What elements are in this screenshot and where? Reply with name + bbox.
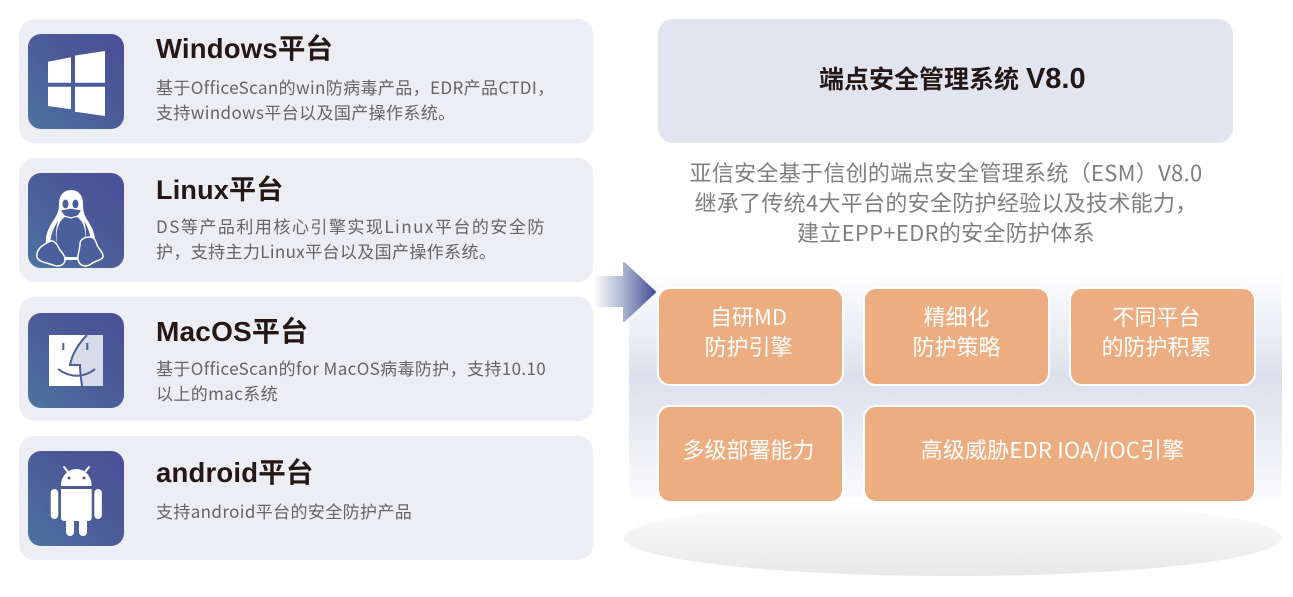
heading: system name: 端点安全管理系统 V8.0 [819, 63, 1086, 95]
text: android description: 支持android平台的安全防护产品 [156, 498, 412, 523]
capability: cross-platform experience [1069, 287, 1256, 386]
icon: Linux penguin [28, 173, 124, 268]
panel: MacOS platform [19, 297, 593, 421]
capability: multi-level deployment: 多级部署能力 [682, 433, 814, 465]
panel: system title [658, 19, 1233, 143]
capability: cross-platform experience: 的防护积累 [1101, 330, 1212, 362]
text: system introduction: 亚信安全基于信创的端点安全管理系统（ESM）V8.0 [690, 156, 1202, 188]
heading: Linux: Linux平台 [156, 175, 283, 205]
capability: fine-grained policy [863, 287, 1050, 386]
icon: Android robot [28, 451, 124, 546]
decorative base ellipse [624, 500, 1282, 576]
heading: Windows: Windows平台 [156, 33, 333, 64]
capability: cross-platform experience: 不同平台 [1112, 300, 1200, 332]
capability: self-developed MD engine: 自研MD [710, 300, 787, 332]
icon: Windows logo [28, 34, 124, 129]
text: MacOS description [156, 355, 546, 405]
text: system introduction [690, 156, 1202, 248]
arrow [596, 262, 656, 322]
capability: fine-grained policy: 精细化 [923, 300, 990, 332]
text: Linux description [156, 213, 546, 263]
panel: Windows platform [19, 19, 593, 143]
heading: MacOS: MacOS平台 [156, 316, 308, 347]
capability: self-developed MD engine: 防护引擎 [704, 330, 792, 362]
icon: Mac Finder [28, 313, 124, 408]
capability: advanced threat EDR engine [863, 405, 1256, 503]
panel: Linux platform [19, 158, 593, 282]
capability: fine-grained policy: 防护策略 [912, 330, 1000, 362]
capability: advanced threat EDR engine: 高级威胁EDR IOA/IOC引擎 [921, 433, 1184, 465]
panel: android platform [19, 436, 593, 560]
text: Linux description: DS等产品利用核心引擎实现Linux平台的安全防 [156, 213, 546, 238]
text: Linux description: 护，支持主力Linux平台以及国产操作系统。 [156, 238, 496, 263]
heading: android: android平台 [156, 457, 314, 488]
text: system introduction: 建立EPP+EDR的安全防护体系 [797, 216, 1095, 248]
text: Windows description: 支持windows平台以及国产操作系统。 [156, 99, 455, 124]
text: system introduction: 继承了传统4大平台的安全防护经验以及技术能力， [694, 186, 1198, 218]
text: Windows description [156, 74, 555, 124]
capability: multi-level deployment [657, 405, 844, 503]
text: MacOS description: 以上的mac系统 [156, 380, 278, 405]
panel: capabilities backdrop [629, 269, 1282, 498]
capability: self-developed MD engine [657, 287, 844, 386]
text: MacOS description: 基于OfficeScan的for MacOS病毒防护，支持10.10 [156, 355, 546, 380]
text: Windows description: 基于OfficeScan的win防病毒产品，EDR产品CTDI， [156, 74, 555, 99]
